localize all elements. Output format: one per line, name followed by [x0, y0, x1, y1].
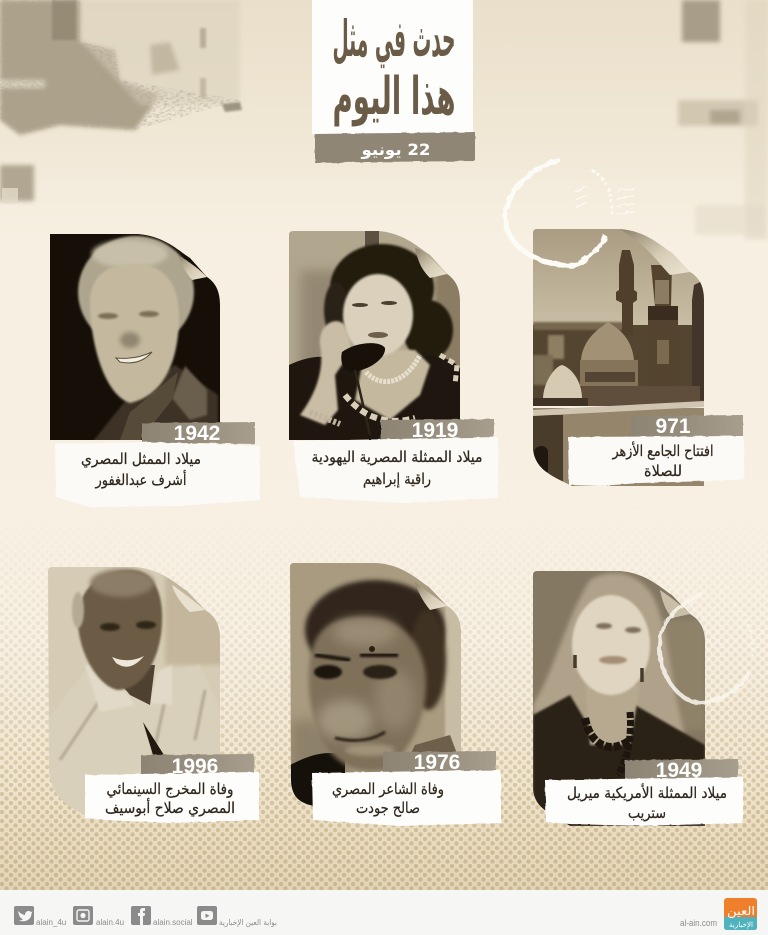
- year banner: [625, 759, 738, 781]
- page curl: [415, 582, 447, 610]
- pearls: [366, 355, 420, 382]
- earrings: [575, 655, 642, 682]
- caption panel: [293, 437, 498, 503]
- caption panel: [85, 772, 259, 823]
- caption line 2: المصري صلاح أبوسيف: [105, 798, 235, 818]
- card: Salah Jawdat: [290, 563, 501, 826]
- card: Meryl Streep: [533, 571, 753, 826]
- face: [572, 595, 650, 695]
- icon: facebook: [131, 906, 151, 925]
- page curl: [620, 229, 690, 275]
- year banner: [383, 751, 496, 773]
- caption line 1: ميلاد الممثلة المصرية اليهودية: [312, 448, 482, 466]
- shoulders and dress: [289, 355, 461, 441]
- card: Ashraf Abdel Ghafour: [50, 234, 260, 507]
- mouth: [335, 732, 385, 740]
- caption line 1: وفاة المخرج السينمائي: [106, 780, 234, 799]
- caption panel: [55, 442, 260, 507]
- neckline trim: [345, 395, 415, 421]
- title card: [312, 0, 473, 134]
- date banner: [315, 132, 475, 163]
- newspaper collage texture: top right: [678, 0, 768, 240]
- caption line 2: للصلاة: [644, 462, 682, 480]
- hair: [324, 244, 453, 360]
- minaret center: [648, 265, 678, 325]
- icon: twitter: [14, 906, 34, 925]
- text: حدث في مثل: [332, 10, 456, 68]
- hair: [533, 573, 685, 735]
- handle: youtube: بوابة العين الإخبارية: [219, 918, 277, 928]
- photo: Ashraf Abdel Ghafour: [50, 234, 222, 445]
- icon: instagram: [73, 906, 93, 925]
- caption panel: [545, 777, 743, 826]
- eyes: [314, 665, 342, 679]
- page curl: [660, 590, 690, 618]
- title panel: [312, 0, 475, 163]
- splash ring: photo overlay: [659, 593, 753, 703]
- jacket: [90, 365, 218, 445]
- year banner: [381, 419, 494, 441]
- year: 1949: [656, 759, 702, 782]
- face: [90, 264, 179, 403]
- heading line 2: هذا اليوم: [332, 67, 456, 127]
- caption line 1: ميلاد الممثل المصري: [81, 450, 201, 469]
- date: 22 يونيو: [360, 140, 431, 159]
- photo: Ragia Ibrahim: [289, 231, 465, 441]
- small dome: [543, 365, 582, 398]
- card: Al-Azhar mosque: [533, 229, 744, 490]
- necklace: [585, 718, 630, 747]
- shoulder: [290, 753, 345, 810]
- icon: youtube: [197, 906, 217, 925]
- main dome: [581, 322, 634, 360]
- caption line 1: افتتاح الجامع الأزهر: [612, 441, 714, 460]
- logo: العين: [727, 904, 755, 919]
- handle: facebook: alain.social: [153, 918, 193, 927]
- lower wall: [582, 386, 700, 406]
- head: [78, 570, 162, 690]
- hair: [76, 234, 196, 332]
- newspaper collage texture: top left: [0, 0, 242, 202]
- photo: Meryl Streep: [533, 571, 705, 826]
- photo: Al-Azhar mosque: [533, 229, 705, 490]
- year banner: [631, 415, 743, 437]
- caption panel: [568, 436, 744, 486]
- year: 1942: [174, 422, 220, 445]
- photo: Salah Abu Seif: [48, 567, 225, 822]
- handle: instagram: alain.4u: [96, 918, 124, 927]
- footer bar: [0, 890, 768, 935]
- handle: twitter: alain_4u: [36, 918, 66, 927]
- arm and hand: [300, 321, 352, 425]
- caption line 1: ميلاد الممثلة الأمريكية ميريل: [567, 783, 727, 802]
- logo: [724, 898, 757, 930]
- shirt: [58, 666, 200, 814]
- face: [343, 274, 413, 356]
- year: 1919: [412, 419, 458, 442]
- telephone: [341, 343, 385, 372]
- caption line 2: أشرف عبدالغفور: [95, 470, 186, 489]
- collar: [85, 665, 135, 712]
- year: 1976: [414, 751, 460, 774]
- website: al-ain.com: [680, 918, 717, 928]
- dark clothing: [533, 695, 705, 826]
- card: Salah Abu Seif: [48, 567, 259, 823]
- neck: [124, 665, 155, 705]
- neck and chest: [355, 350, 430, 420]
- caption panel: [312, 770, 501, 826]
- splash ring: top right: [505, 160, 635, 266]
- page curl: [172, 585, 205, 612]
- caption line 2: صالح جودت: [356, 799, 420, 817]
- page curl: [178, 255, 207, 280]
- face: [309, 617, 426, 771]
- hair: [305, 580, 445, 680]
- minaret left: [616, 250, 637, 335]
- page curl: [415, 248, 447, 278]
- front wall: [533, 408, 705, 488]
- neck: [585, 680, 640, 745]
- minaret right: [692, 280, 704, 400]
- bracelet: [310, 412, 340, 424]
- smile: [116, 352, 152, 363]
- caption line 2: راقية إبراهيم: [363, 470, 431, 488]
- photo: Salah Jawdat: [290, 563, 465, 813]
- year banner: [142, 422, 255, 444]
- year: 971: [655, 415, 691, 438]
- caption line 2: ستريب: [628, 804, 666, 822]
- logo: الإخبارية: [729, 921, 753, 929]
- year banner: [141, 754, 254, 776]
- caption line 1: وفاة الشاعر المصري: [332, 780, 444, 799]
- year: 1996: [172, 755, 218, 778]
- card: Ragia Ibrahim: [289, 231, 498, 503]
